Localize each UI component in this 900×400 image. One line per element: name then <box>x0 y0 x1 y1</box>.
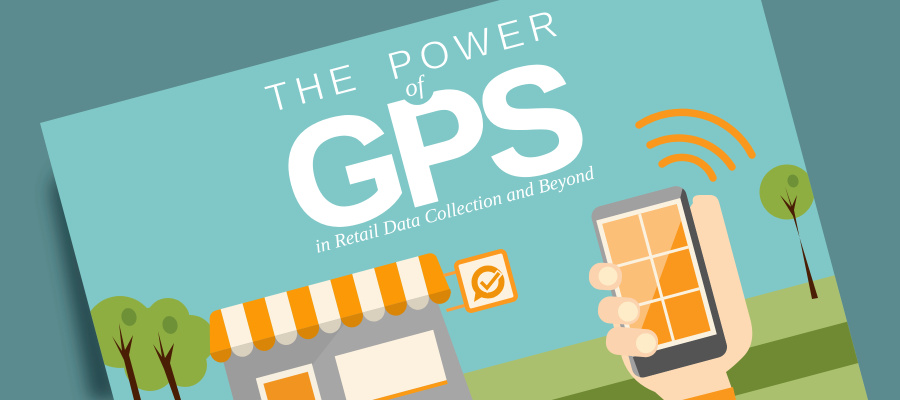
tree right <box>760 164 818 299</box>
ground: dark green band <box>552 322 858 400</box>
awning <box>200 250 453 365</box>
icon: speech bubble check <box>474 268 502 302</box>
sign arms <box>443 270 465 312</box>
notch behind of <box>400 71 434 105</box>
sign with check icon <box>455 250 517 312</box>
wall shadow <box>224 320 344 400</box>
wifi signal arcs <box>639 112 752 178</box>
scene clipped to poster <box>84 112 900 400</box>
shop door window <box>256 363 322 400</box>
hand palm and thumb <box>612 195 752 400</box>
shop front window <box>335 330 448 400</box>
title: GPS: GPS <box>265 26 602 269</box>
phone body <box>589 184 729 380</box>
phone <box>589 184 729 380</box>
store wall <box>220 291 473 400</box>
title: of: of <box>402 71 430 103</box>
finger one <box>588 262 623 291</box>
ground: light green <box>463 275 868 400</box>
phone screen <box>596 198 717 357</box>
title: THE POWER: THE POWER <box>261 1 568 122</box>
finger three <box>605 326 659 358</box>
finger two <box>597 296 641 325</box>
poster shadow <box>50 165 122 400</box>
trees left <box>84 296 215 400</box>
subtitle: in Retail Data Collection and Beyond <box>313 163 597 258</box>
sleeve cuff <box>682 387 736 400</box>
store <box>200 250 473 400</box>
